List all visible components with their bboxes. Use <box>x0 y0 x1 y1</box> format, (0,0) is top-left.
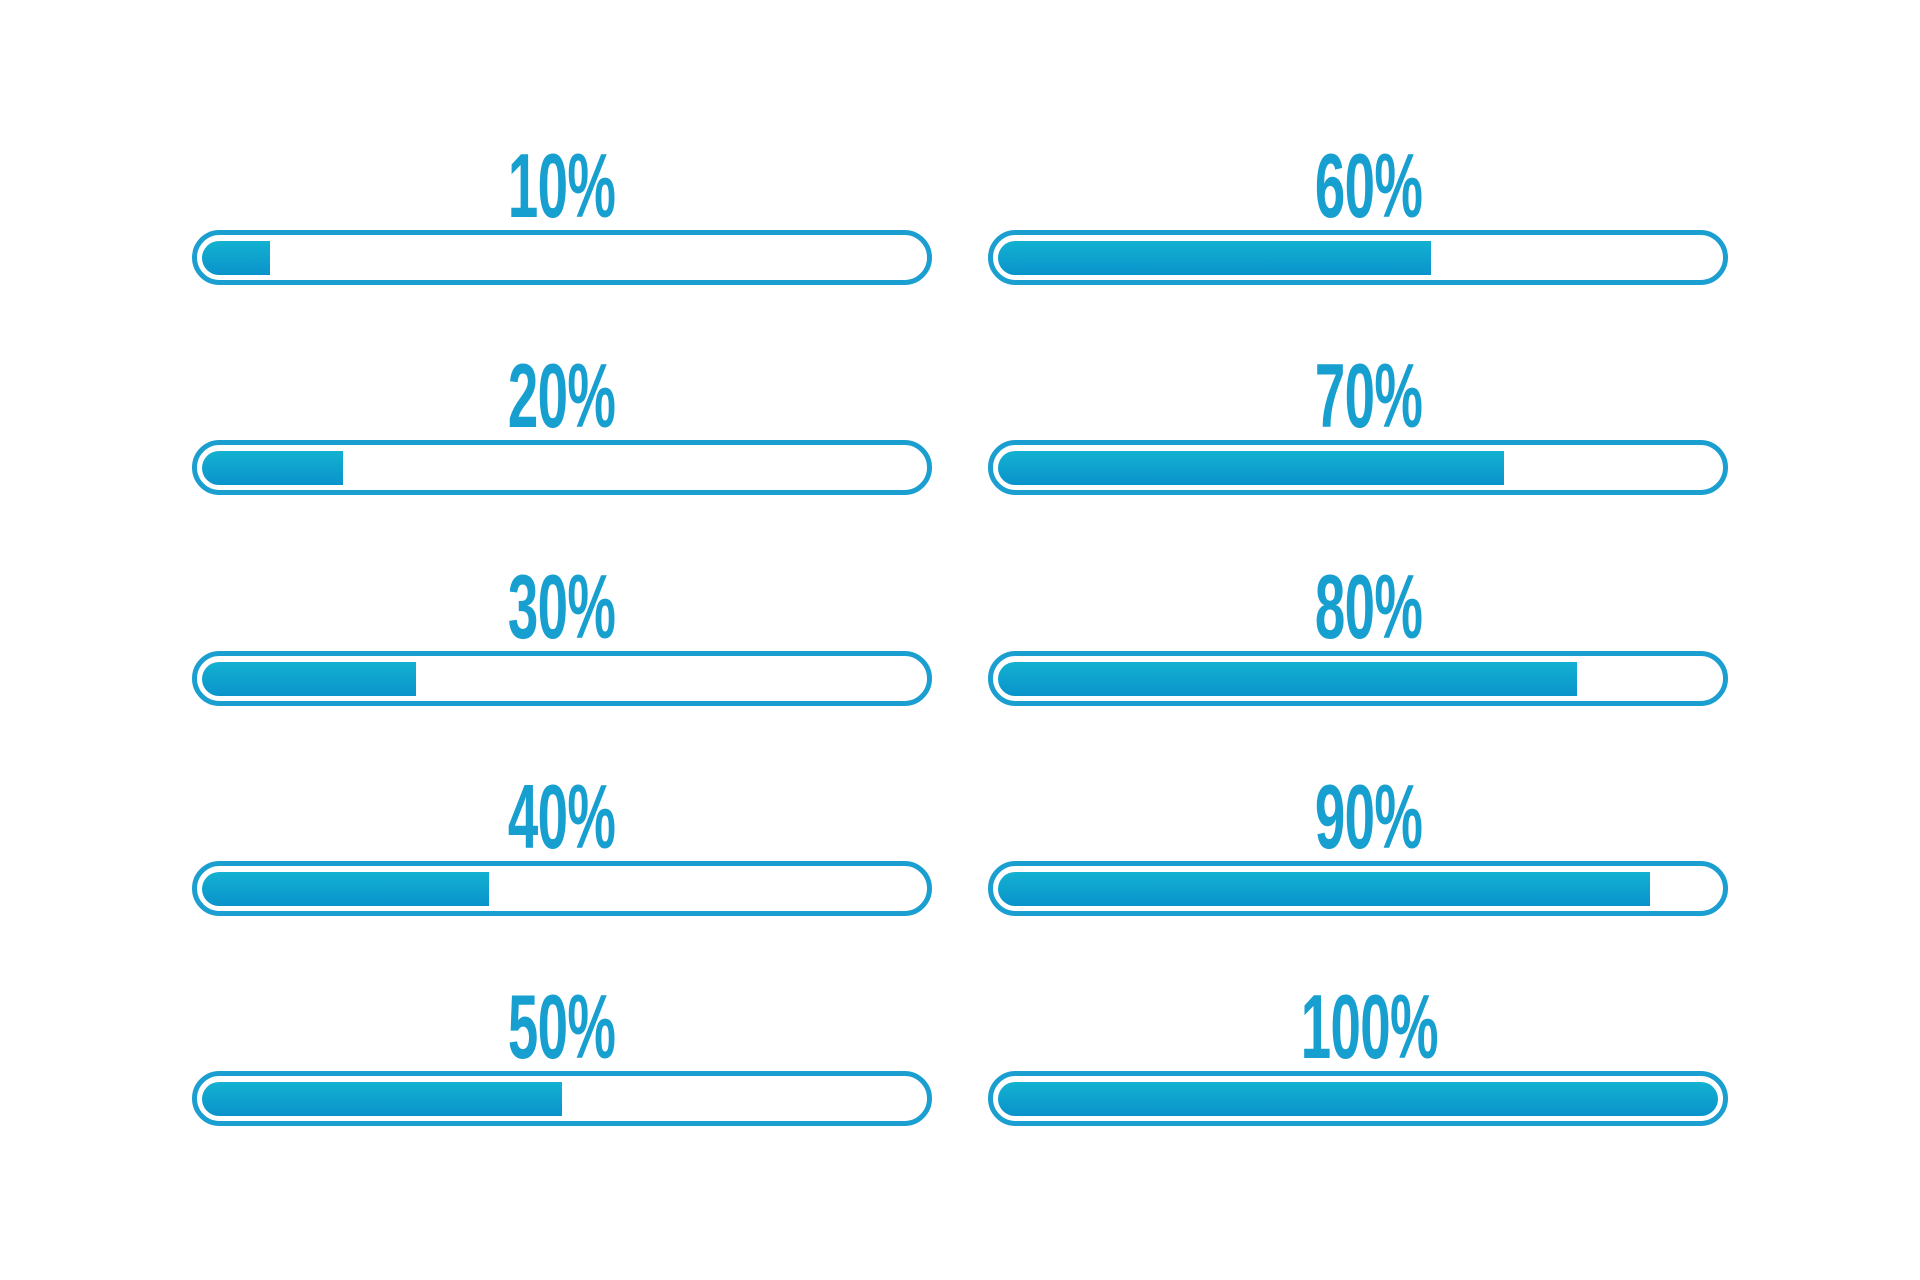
bar item: 20% <box>192 346 932 495</box>
bar item: 10% <box>192 136 932 285</box>
label 50%: 50% <box>508 977 616 1078</box>
label 20%: 20% <box>508 346 616 447</box>
bar item: 40% <box>192 767 932 916</box>
label 80%: 80% <box>1315 557 1423 658</box>
bar item: 30% <box>192 557 932 706</box>
label 100%: 100% <box>1300 977 1438 1078</box>
bar item: 90% <box>988 767 1728 916</box>
progress bar 30% <box>192 651 932 706</box>
progress bar 100% <box>988 1071 1728 1126</box>
label 90%: 90% <box>1315 767 1423 868</box>
bar item: 100% <box>988 977 1728 1126</box>
label 30%: 30% <box>508 557 616 658</box>
progress bar 50% <box>192 1071 932 1126</box>
bar item: 60% <box>988 136 1728 285</box>
progress bar 10% <box>192 230 932 285</box>
progress bar 80% <box>988 651 1728 706</box>
progress bar 20% <box>192 440 932 495</box>
progress bar 40% <box>192 861 932 916</box>
progress bar 70% <box>988 440 1728 495</box>
label 10%: 10% <box>508 136 616 237</box>
label 60%: 60% <box>1315 136 1423 237</box>
label 70%: 70% <box>1315 346 1423 447</box>
progress bar 60% <box>988 230 1728 285</box>
bar item: 80% <box>988 557 1728 706</box>
bar item: 70% <box>988 346 1728 495</box>
label 40%: 40% <box>508 767 616 868</box>
bar item: 50% <box>192 977 932 1126</box>
progress bar 90% <box>988 861 1728 916</box>
